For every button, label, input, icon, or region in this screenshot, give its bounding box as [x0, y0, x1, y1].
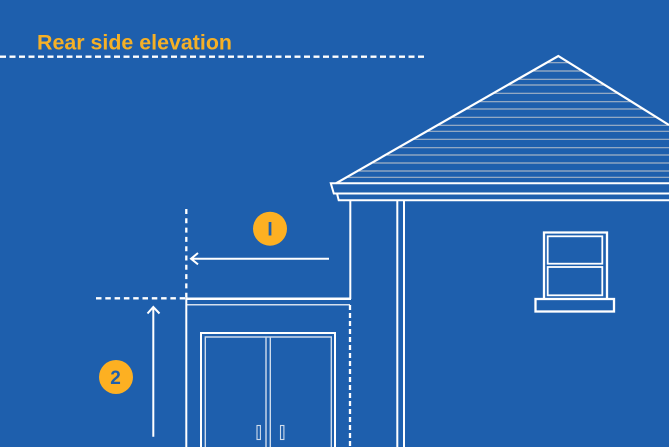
eaves and fascia	[331, 183, 669, 200]
window	[536, 232, 614, 312]
arrow 1	[191, 253, 329, 264]
house wall	[350, 200, 404, 447]
title: Rear side elevation	[37, 31, 232, 54]
badge 1	[253, 212, 287, 246]
badge 2	[99, 360, 133, 394]
badge 2: 2	[110, 368, 121, 389]
house roof	[331, 56, 669, 200]
badge 1: I	[267, 220, 273, 240]
dotted extension guide lines	[96, 209, 350, 447]
arrow 2	[148, 307, 160, 437]
double doors	[201, 333, 335, 447]
roof outline	[336, 56, 669, 183]
extension outline	[186, 298, 351, 447]
roof tile lines	[348, 63, 669, 177]
